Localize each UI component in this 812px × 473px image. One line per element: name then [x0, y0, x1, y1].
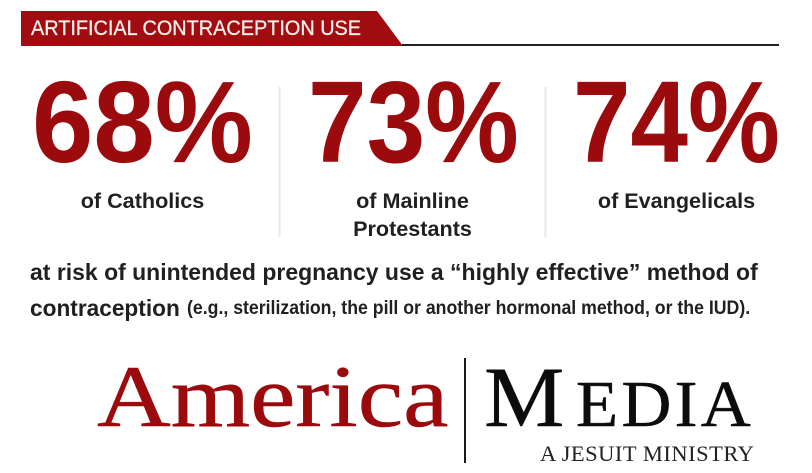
- stat: 73%: 73%: [308, 57, 519, 187]
- logo divider: [464, 358, 466, 463]
- label: of Catholics: of Catholics: [81, 188, 204, 213]
- examples in parentheses: (e.g., sterilization, the pill or another hormonal method, or the IUD).: [187, 298, 750, 319]
- description line 1: at risk of unintended pregnancy use a “highly effective” method of: [30, 259, 758, 285]
- logo: America wordmark: America: [97, 349, 448, 446]
- label: of Mainline Protestants: [353, 188, 472, 241]
- stat: 74%: 74%: [573, 57, 780, 187]
- header banner: [21, 11, 779, 46]
- label: of Evangelicals: of Evangelicals: [598, 188, 755, 213]
- stat: 68%: 68%: [32, 57, 253, 187]
- heading: ARTIFICIAL CONTRACEPTION USE: [31, 17, 361, 40]
- logo: Media wordmark: MEDIA: [484, 349, 754, 445]
- column dividers: [278, 87, 546, 237]
- label: of Mainline Protestants: of Mainline: [356, 188, 469, 213]
- description line 2: [30, 295, 750, 321]
- contraception lead word: contraception: [30, 295, 180, 321]
- label: of Mainline Protestants: Protestants: [353, 216, 472, 241]
- logo: A Jesuit Ministry tagline: A JESUIT MINISTRY: [540, 441, 754, 466]
